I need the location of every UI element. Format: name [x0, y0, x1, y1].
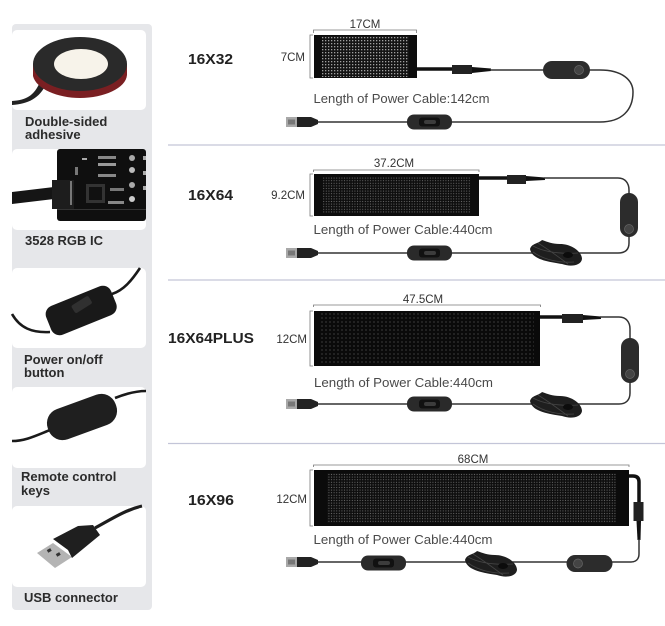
- power cable: [286, 314, 639, 418]
- LED panel: [314, 174, 479, 216]
- feature: double-sided adhesive: [12, 30, 146, 142]
- width dimension: 37.2CM: 37.2CM: [374, 158, 414, 170]
- width dimension: 68CM: 68CM: [458, 454, 488, 466]
- cable length text: Length of Power Cable:142cm: [314, 91, 490, 106]
- feature: USB connector: [12, 506, 146, 605]
- icon: tape roll: [12, 37, 127, 105]
- icon: USB plug: [37, 506, 142, 568]
- LED panel: [314, 311, 540, 366]
- caption: 3528 RGB IC: 3528 RGB IC: [25, 233, 104, 248]
- power cable: [286, 175, 638, 266]
- cable length text: Length of Power Cable:440cm: [314, 532, 492, 547]
- icon: circuit board: [12, 149, 146, 221]
- power cable: [286, 476, 644, 577]
- caption: power on/off button: Power on/off: [24, 352, 103, 367]
- caption: remote control keys: Remote control: [21, 469, 116, 484]
- caption: power on/off button: button: [24, 365, 64, 380]
- icon: inline remote: [12, 390, 146, 444]
- height dimension: 12CM: [276, 470, 313, 526]
- caption: double-sided adhesive: adhesive: [25, 127, 81, 142]
- width dimension: 17CM: 17CM: [350, 19, 380, 31]
- icon: inline switch: [12, 268, 140, 338]
- power cable: [286, 61, 633, 130]
- feature: 3528 RGB IC: [12, 149, 146, 248]
- cable length text: Length of Power Cable:440cm: [314, 375, 493, 390]
- cable length text: Length of Power Cable:440cm: [314, 222, 492, 237]
- height dimension: 12CM: 12CM: [276, 334, 307, 346]
- feature: power button: [12, 268, 146, 380]
- size label: 16X32: 16X32: [188, 51, 233, 68]
- width dimension: 17CM: [314, 19, 416, 33]
- size label: 16X64PLUS: 16X64PLUS: [168, 330, 254, 347]
- panel: feature sidebar: [12, 24, 152, 610]
- caption: remote control keys: keys: [21, 483, 50, 498]
- width dimension: 47.5CM: 47.5CM: [403, 294, 443, 306]
- caption: double-sided adhesive: Double-sided: [25, 114, 107, 129]
- LED panel: [314, 470, 629, 526]
- height dimension: 7CM: 7CM: [281, 52, 305, 64]
- row: 16X64: [188, 158, 638, 266]
- feature: remote keys: [12, 387, 146, 498]
- height dimension: 9.2CM: 9.2CM: [271, 190, 305, 202]
- height dimension: 12CM: 12CM: [276, 494, 307, 506]
- size label: 16X96: 16X96: [188, 492, 234, 509]
- height dimension: 7CM: [281, 35, 313, 78]
- height dimension: 9.2CM: [271, 174, 313, 216]
- LED panel: [314, 35, 417, 78]
- height dimension: 12CM: [276, 311, 313, 366]
- caption: USB connector: USB connector: [24, 590, 118, 605]
- row: 16X64PLUS: [168, 294, 639, 418]
- row: 16X96: [188, 454, 644, 577]
- size label: 16X64: 16X64: [188, 187, 234, 204]
- row: 16X32: [188, 19, 633, 130]
